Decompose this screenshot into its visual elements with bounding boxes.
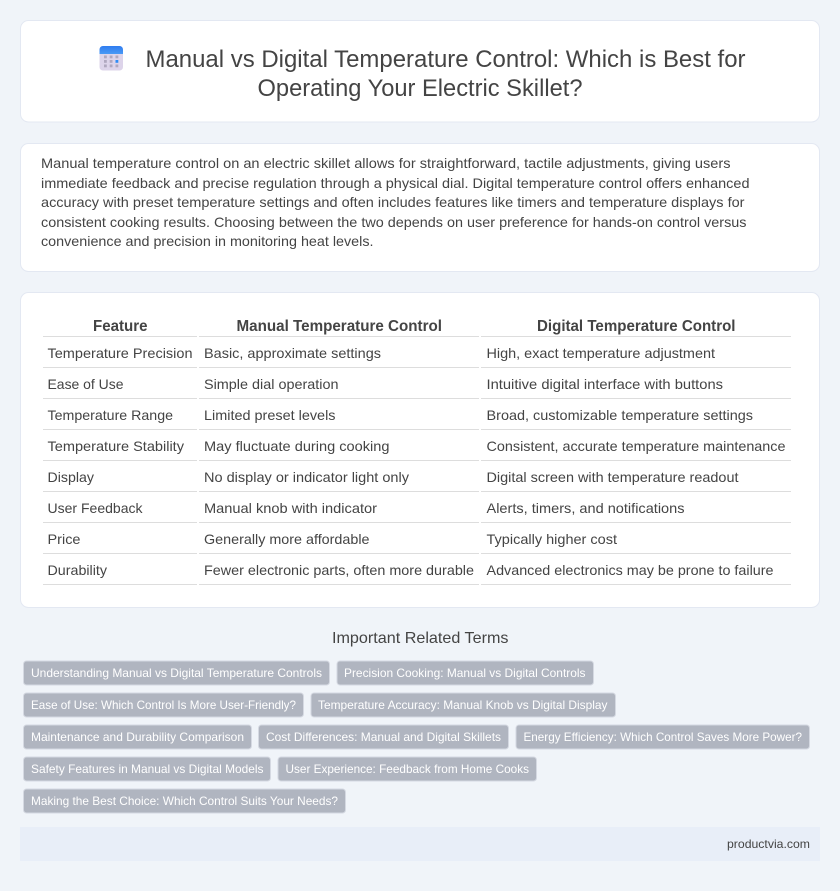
table row: durability: Advanced electronics may be prone to failure bbox=[486, 562, 774, 578]
table row: temperature stability: May fluctuate during cooking bbox=[204, 438, 390, 454]
text block: introduction paragraph: accuracy with preset temperature settings and often includes features like timers and temperature displays for bbox=[41, 194, 745, 210]
tag: making the best choice bbox=[24, 789, 346, 813]
title bbox=[146, 46, 746, 102]
table row: display: Display bbox=[48, 469, 94, 485]
tag: energy efficiency bbox=[516, 725, 810, 749]
table row: temperature range bbox=[43, 407, 791, 430]
table row: price bbox=[43, 531, 791, 554]
footer source text: productvia.com bbox=[727, 837, 810, 851]
tag: maintenance and durability bbox=[24, 725, 252, 749]
table header row: Digital Temperature Control bbox=[537, 318, 736, 335]
tag: precision cooking bbox=[337, 661, 594, 685]
tag: maintenance and durability: Maintenance and Durability Comparison bbox=[31, 730, 244, 744]
table row: durability: Fewer electronic parts, often more durable bbox=[204, 562, 474, 578]
tag: temperature accuracy bbox=[311, 693, 616, 717]
tag: making the best choice: Making the Best Choice: Which Control Suits Your Needs? bbox=[31, 794, 338, 808]
text block: introduction paragraph bbox=[41, 155, 750, 249]
tag: ease of use bbox=[24, 693, 304, 717]
text block: introduction paragraph: Manual temperature control on an electric skillet allows for straightforward, tactile adjustments, giving users bbox=[41, 155, 730, 171]
table header row bbox=[43, 318, 791, 337]
table row: ease of use: Ease of Use bbox=[48, 376, 124, 392]
icon: calendar bbox=[100, 46, 123, 70]
panel: title header bbox=[20, 20, 820, 122]
table header row: Feature bbox=[93, 318, 148, 335]
tag: user experience bbox=[278, 757, 536, 781]
title: Operating Your Electric Skillet? bbox=[258, 75, 582, 102]
table row: display: No display or indicator light only bbox=[204, 469, 409, 485]
table row: user feedback: Manual knob with indicator bbox=[204, 500, 377, 516]
tag: safety features bbox=[24, 757, 270, 781]
footer bar bbox=[20, 827, 820, 861]
tag: cost differences: Cost Differences: Manual and Digital Skillets bbox=[266, 730, 501, 744]
table row: durability: Durability bbox=[48, 562, 107, 578]
table row: temperature stability bbox=[43, 438, 791, 461]
table row: temperature precision: Basic, approximate settings bbox=[204, 345, 381, 361]
table row: temperature precision: High, exact temperature adjustment bbox=[486, 345, 715, 361]
tag: cost differences bbox=[258, 725, 508, 749]
table row: user feedback: User Feedback bbox=[48, 500, 143, 516]
tag: temperature accuracy: Temperature Accuracy: Manual Knob vs Digital Display bbox=[318, 698, 608, 712]
panel: introduction bbox=[20, 144, 820, 272]
table row: display: Digital screen with temperature readout bbox=[486, 469, 739, 485]
table row: temperature range: Temperature Range bbox=[48, 407, 173, 423]
table row: ease of use bbox=[43, 376, 791, 399]
table row: user feedback bbox=[43, 500, 791, 523]
tag list: related terms bbox=[24, 661, 810, 813]
table row: ease of use: Intuitive digital interface with buttons bbox=[486, 376, 723, 392]
table row: display bbox=[43, 469, 791, 492]
panel: comparison table bbox=[20, 292, 820, 608]
text block: introduction paragraph: consistent cooking results. Choosing between the two depends on user preference for hands-on control versus bbox=[41, 214, 746, 230]
tag: safety features: Safety Features in Manual vs Digital Models bbox=[31, 762, 264, 776]
table row: temperature stability: Consistent, accurate temperature maintenance bbox=[486, 438, 786, 454]
table row: price: Price bbox=[48, 531, 81, 547]
table header row: Manual Temperature Control bbox=[236, 318, 442, 335]
table row: ease of use: Simple dial operation bbox=[204, 376, 338, 392]
table row: price: Typically higher cost bbox=[486, 531, 617, 547]
tag: understanding controls bbox=[24, 661, 330, 685]
table row: temperature range: Limited preset levels bbox=[204, 407, 336, 423]
tag: user experience: User Experience: Feedback from Home Cooks bbox=[286, 762, 529, 776]
title: Manual vs Digital Temperature Control: Which is Best for bbox=[146, 46, 746, 73]
table row: user feedback: Alerts, timers, and notifications bbox=[486, 500, 684, 516]
heading: important related terms: Important Related Terms bbox=[332, 630, 508, 647]
tag: understanding controls: Understanding Manual vs Digital Temperature Controls bbox=[31, 666, 322, 680]
table row: price: Generally more affordable bbox=[204, 531, 370, 547]
text block: introduction paragraph: immediate feedback and precise regulation through a physical dial. Digital temperature control offers enhanced bbox=[41, 175, 750, 191]
table row: temperature precision bbox=[43, 345, 791, 368]
table row: temperature range: Broad, customizable temperature settings bbox=[486, 407, 753, 423]
table row: durability bbox=[43, 562, 791, 585]
table row: temperature stability: Temperature Stability bbox=[48, 438, 184, 454]
table row: temperature precision: Temperature Precision bbox=[48, 345, 192, 361]
tag: energy efficiency: Energy Efficiency: Which Control Saves More Power? bbox=[524, 730, 802, 744]
text block: introduction paragraph: convenience and precision in monitoring heat levels. bbox=[41, 233, 374, 249]
tag: precision cooking: Precision Cooking: Manual vs Digital Controls bbox=[344, 666, 586, 680]
tag: ease of use: Ease of Use: Which Control Is More User-Friendly? bbox=[31, 698, 296, 712]
